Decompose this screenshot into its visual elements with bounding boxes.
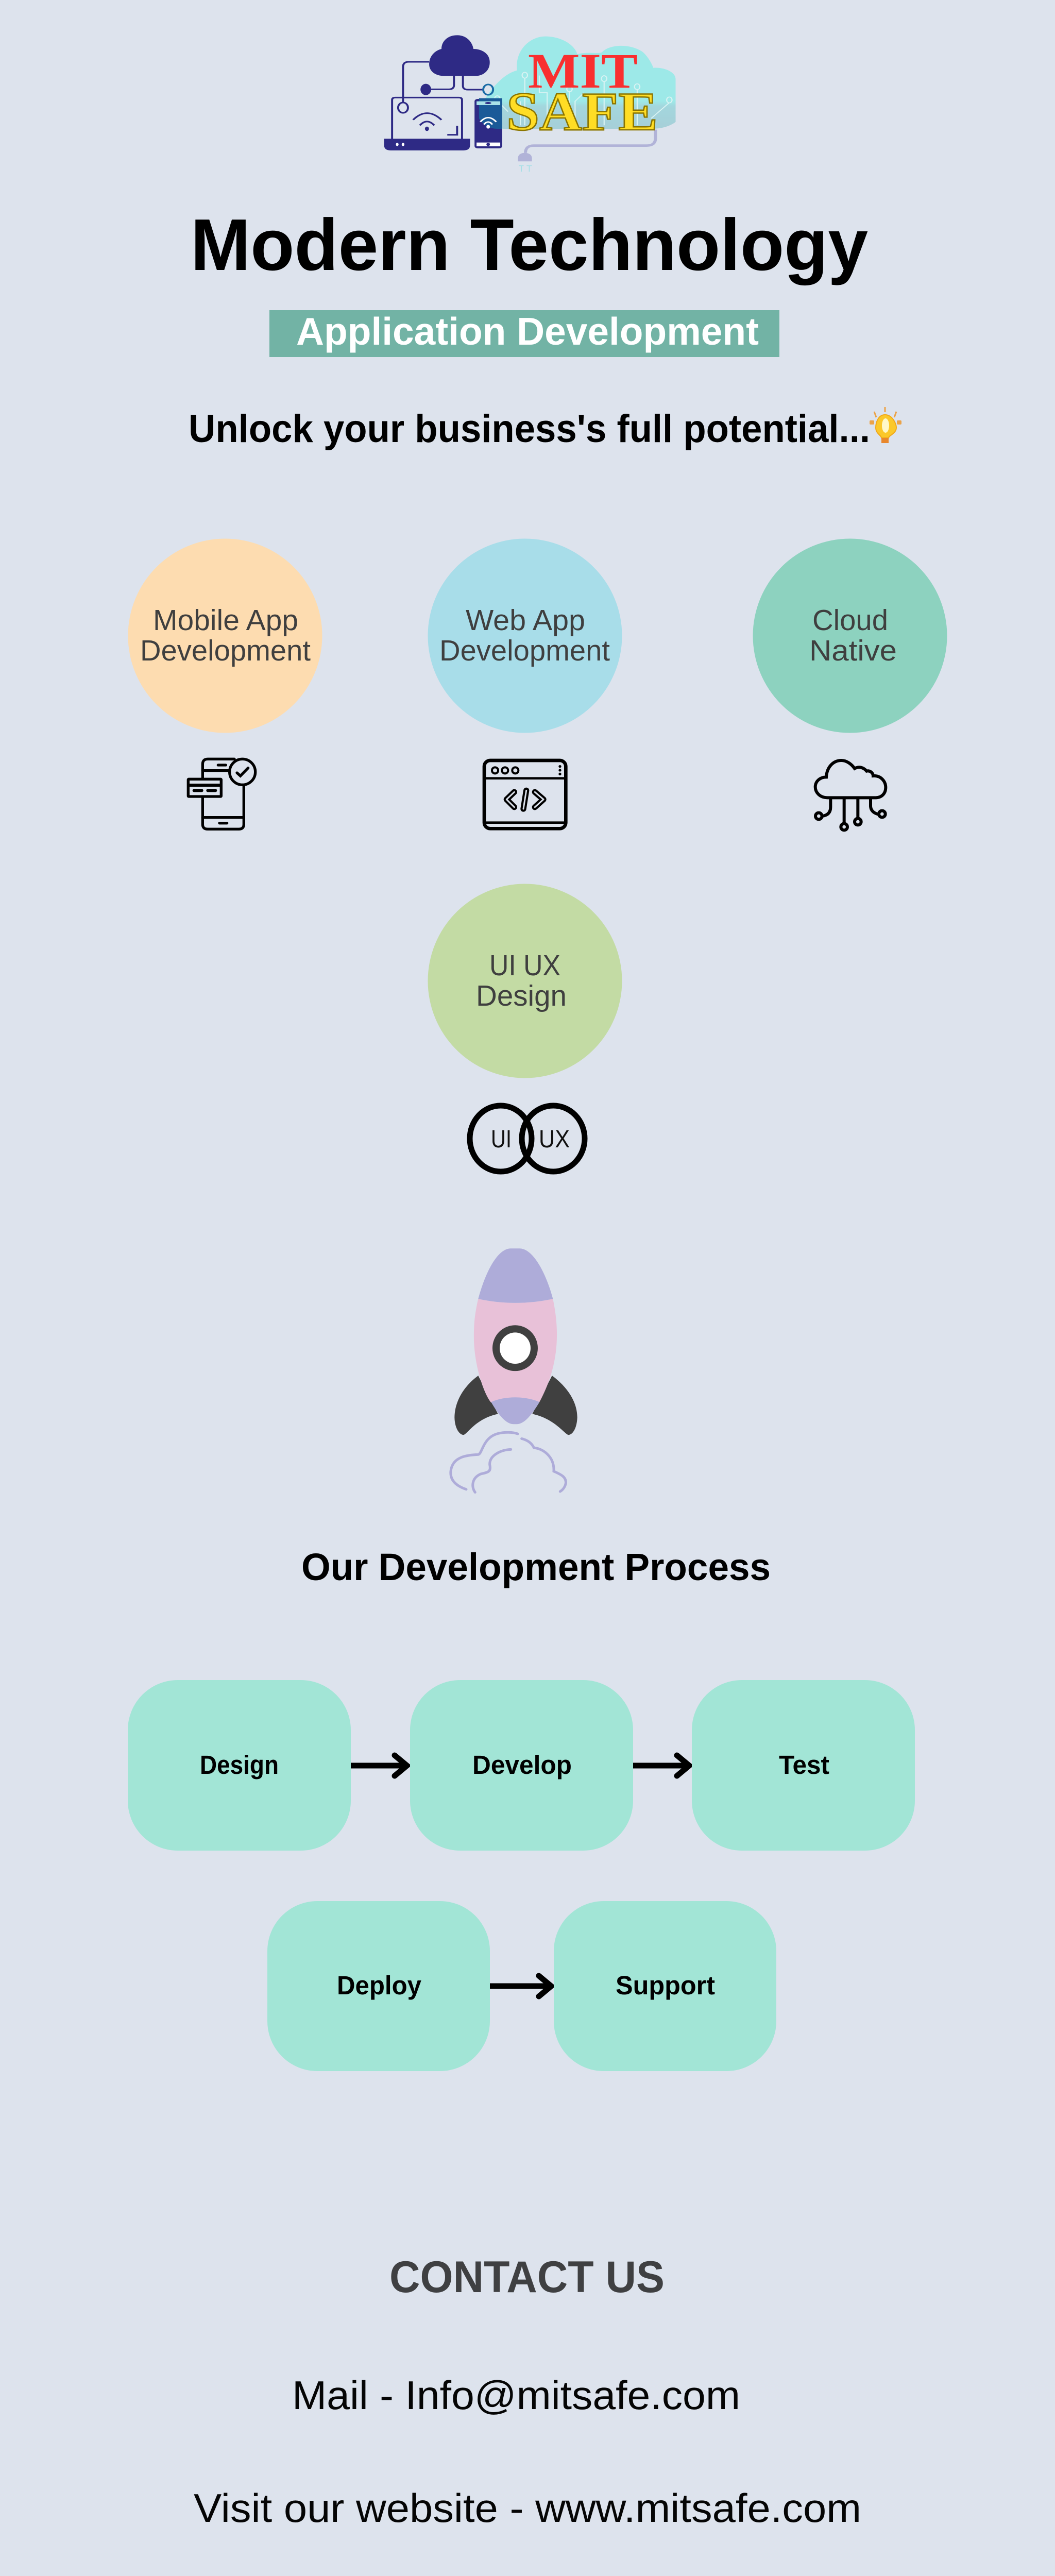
logo text: MIT: MIT bbox=[528, 43, 638, 98]
icon: network connectors bbox=[398, 62, 493, 113]
heading: our development process: Our Development Process bbox=[301, 1546, 771, 1588]
step label: deploy: Deploy bbox=[337, 1971, 422, 2000]
process step: design bbox=[128, 1680, 351, 1851]
circle label: native: Native bbox=[809, 634, 897, 667]
tagline: Unlock your business's full potential... bbox=[189, 407, 870, 451]
circle label: development: Development bbox=[439, 634, 610, 667]
icon: navy cloud bbox=[429, 35, 490, 76]
circle label: design: Design bbox=[476, 979, 567, 1012]
icon: teal circuit cloud bbox=[481, 37, 676, 129]
process step: support bbox=[554, 1901, 776, 2071]
panel: mobile app development bbox=[128, 539, 322, 733]
icon: cloud native bbox=[815, 760, 886, 830]
arrow: design to develop bbox=[351, 1755, 407, 1776]
subtitle banner bbox=[269, 310, 779, 357]
icon: ui ux venn bbox=[470, 1106, 585, 1172]
step label: design: Design bbox=[200, 1750, 279, 1780]
step label: develop: Develop bbox=[472, 1750, 572, 1780]
panel: ui ux design bbox=[428, 884, 622, 1078]
circle label: cloud: Cloud bbox=[812, 604, 888, 637]
arrow: develop to test bbox=[633, 1755, 689, 1776]
icon: light bulb bbox=[870, 407, 901, 443]
panel: web app development bbox=[428, 539, 622, 733]
panel: cloud native bbox=[753, 539, 947, 733]
arrow: deploy to support bbox=[490, 1976, 551, 1996]
circle label: web app: Web App bbox=[466, 604, 585, 637]
circle label: mobile app: Mobile App bbox=[153, 604, 298, 637]
icon: web app bbox=[484, 760, 566, 828]
step label: support: Support bbox=[616, 1971, 715, 2000]
icon: circuit traces bbox=[495, 72, 672, 125]
icon: power cable and plug bbox=[518, 130, 655, 172]
process step: test bbox=[692, 1680, 915, 1851]
step label: test: Test bbox=[779, 1750, 829, 1780]
icon: laptop with wifi bbox=[384, 97, 470, 150]
venn label: ui: UI bbox=[491, 1126, 512, 1153]
contact: mail: Mail - Info@mitsafe.com bbox=[292, 2372, 740, 2418]
title: Modern Technology bbox=[191, 204, 868, 286]
logo text: SAFE: SAFE bbox=[506, 81, 658, 142]
icon: mobile app bbox=[188, 759, 256, 829]
process step: develop bbox=[410, 1680, 633, 1851]
contact: website: Visit our website - www.mitsafe.com bbox=[194, 2485, 861, 2531]
heading: contact us: CONTACT US bbox=[389, 2252, 665, 2302]
venn label: ux: UX bbox=[539, 1126, 570, 1153]
icon: smartphone with wifi bbox=[474, 98, 502, 148]
logo: MIT SAFE bbox=[384, 35, 676, 172]
process step: deploy bbox=[267, 1901, 490, 2071]
subtitle text: Application Development bbox=[296, 310, 759, 353]
circle label: development: Development bbox=[140, 634, 311, 667]
icon: rocket bbox=[451, 1248, 577, 1493]
circle label: ui ux: UI UX bbox=[489, 949, 560, 982]
